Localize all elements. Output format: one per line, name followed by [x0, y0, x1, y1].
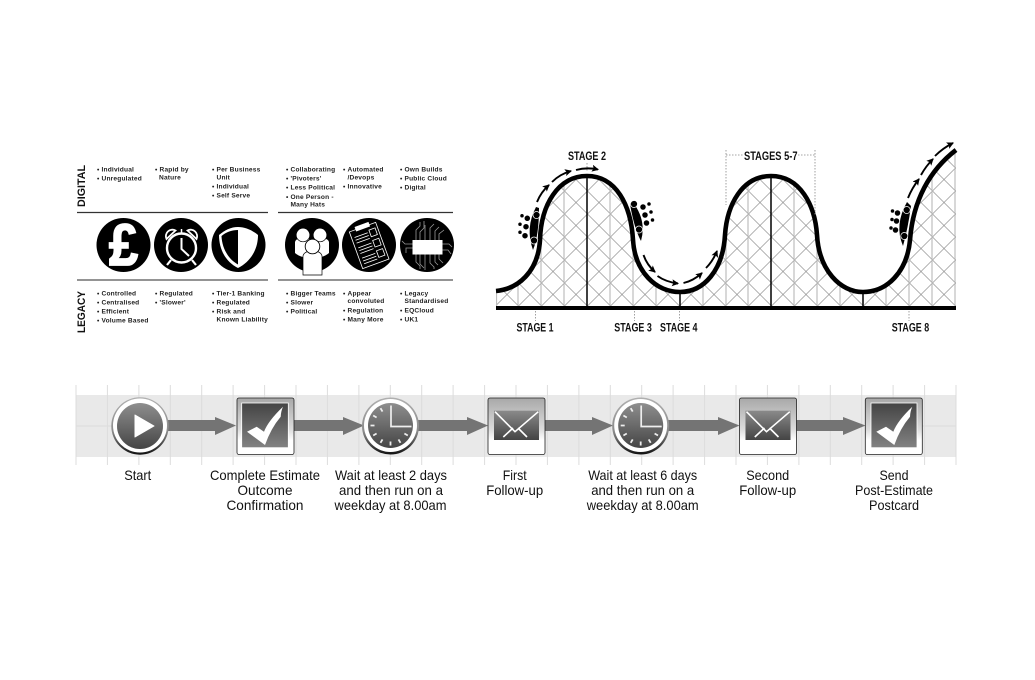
text block: digital bullets: • Unregulated: [97, 176, 142, 182]
icon: people: [285, 218, 339, 275]
text block: legacy bullets: • Efficient: [97, 308, 130, 316]
panel: digital vs legacy comparison: [76, 165, 454, 333]
text block: digital bullets: Nature: [159, 174, 181, 182]
step: send postcard: [865, 398, 922, 454]
icon: pound: £: [109, 213, 138, 278]
step: complete estimate: [237, 398, 294, 454]
panel: workflow timeline: [76, 385, 956, 513]
text block: digital bullets: • Less Political: [286, 184, 335, 192]
text block: legacy bullets: • Volume Based: [97, 318, 149, 324]
step labels: Wait at least 2 days: [335, 467, 447, 483]
stage labels: [516, 149, 930, 334]
text block: digital bullets: • One Person -: [286, 194, 334, 201]
text block: digital bullets: [97, 166, 447, 208]
label: LEGACY: LEGACY: [76, 290, 88, 333]
text block: digital bullets: • Collaborating: [286, 166, 335, 174]
step: start: [111, 397, 169, 455]
icon: coaster car 2: [630, 200, 652, 241]
text block: digital bullets: • Self Serve: [212, 192, 250, 200]
text block: legacy bullets: Known Liability: [216, 316, 268, 324]
step labels: weekday at 8.00am: [586, 497, 699, 513]
lattice: [496, 154, 956, 306]
stage labels: STAGES 5-7: [744, 149, 798, 163]
stage labels: STAGE 8: [892, 320, 930, 334]
step labels: and then run on a: [339, 482, 443, 498]
timeline band: [76, 385, 956, 465]
text block: legacy bullets: • Regulated: [212, 300, 250, 306]
stage labels: STAGE 3: [614, 320, 652, 334]
stage labels: STAGE 1: [516, 320, 554, 334]
text block: legacy bullets: • Risk and: [212, 308, 245, 316]
step labels: Second: [746, 467, 789, 483]
text block: digital bullets: • Innovative: [343, 184, 382, 190]
text block: digital bullets: • Public Cloud: [400, 176, 447, 182]
text block: digital bullets: • Per Business: [212, 166, 261, 174]
text block: legacy bullets: • Legacy: [400, 290, 428, 298]
arrows between steps: [165, 417, 866, 435]
ground: [496, 306, 956, 310]
step labels: [124, 467, 933, 513]
step labels: Outcome: [238, 482, 293, 498]
text block: legacy bullets: • Bigger Teams: [286, 290, 336, 298]
step labels: Wait at least 6 days: [588, 467, 697, 483]
text block: digital bullets: • Rapid by: [155, 166, 189, 174]
text block: digital bullets: • Own Builds: [400, 166, 443, 174]
step: second follow-up: [740, 398, 796, 454]
step labels: Complete Estimate: [210, 467, 320, 483]
step labels: Post-Estimate: [855, 482, 933, 498]
text block: digital bullets: • Individual: [97, 166, 134, 174]
step labels: Confirmation: [226, 497, 304, 513]
text block: legacy bullets: • Appear: [343, 290, 372, 298]
text block: digital bullets: /Devops: [348, 174, 375, 182]
track: [496, 150, 956, 292]
icon: coaster car 3: [891, 202, 911, 246]
text block: legacy bullets: • Regulated: [155, 290, 193, 298]
text block: digital bullets: • Digital: [400, 184, 426, 192]
step labels: First: [503, 467, 527, 483]
icon: clipboard: [342, 218, 396, 272]
text block: legacy bullets: convoluted: [348, 298, 384, 305]
step labels: weekday at 8.00am: [334, 497, 446, 513]
text block: legacy bullets: • Slower: [286, 300, 313, 306]
text block: legacy bullets: • Centralised: [97, 300, 139, 306]
step: wait 2 days: [362, 398, 419, 454]
text block: digital bullets: • Individual: [212, 184, 249, 190]
icon: pound: [96, 213, 150, 278]
text block: legacy bullets: • UK1: [400, 316, 418, 324]
text block: digital bullets: Many Hats: [290, 202, 325, 208]
text block: legacy bullets: • 'Slower': [155, 300, 186, 306]
text block: legacy bullets: [97, 290, 448, 324]
step: wait 6 days: [612, 398, 669, 454]
step labels: Follow-up: [739, 482, 796, 498]
dotted guides: [536, 150, 909, 321]
step labels: Send: [880, 467, 908, 483]
icon: shield: [212, 218, 266, 272]
label: DIGITAL: DIGITAL: [76, 165, 88, 207]
icon: alarm clock: [154, 218, 208, 272]
step: first follow-up: [488, 398, 545, 454]
text block: digital bullets: • Automated: [343, 166, 384, 174]
text block: legacy bullets: • EQCloud: [400, 308, 434, 314]
text block: digital bullets: Unit: [216, 174, 231, 182]
text block: legacy bullets: • Political: [286, 308, 317, 316]
stage labels: STAGE 2: [568, 149, 606, 163]
step labels: and then run on a: [591, 482, 694, 498]
text block: legacy bullets: Standardised: [404, 298, 448, 305]
text block: digital bullets: • 'Pivoters': [286, 176, 322, 182]
icon: circuit chip: [400, 218, 454, 272]
chart: roller coaster stages: [496, 140, 956, 334]
text block: legacy bullets: • Regulation: [343, 308, 383, 314]
text block: legacy bullets: • Many More: [343, 316, 384, 324]
stage labels: STAGE 4: [660, 320, 698, 334]
text block: legacy bullets: • Tier-1 Banking: [212, 290, 265, 298]
icon: coaster car 1: [520, 207, 540, 250]
step labels: Start: [124, 467, 151, 483]
direction arrows: [537, 143, 953, 284]
text block: legacy bullets: • Controlled: [97, 290, 136, 298]
step labels: Postcard: [869, 497, 919, 513]
step labels: Follow-up: [486, 482, 543, 498]
